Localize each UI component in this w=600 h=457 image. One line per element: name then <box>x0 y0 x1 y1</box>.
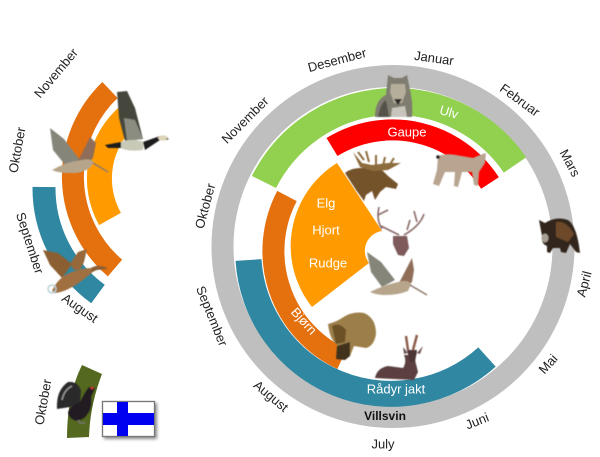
label: Elg: Elg <box>317 196 335 210</box>
icon: red deer head <box>378 207 424 256</box>
icon: lynx <box>433 153 486 187</box>
icon: brown duck <box>43 249 108 293</box>
label: Ulv: Ulv <box>438 102 461 122</box>
wedge: Elg Hjort Rudge season <box>291 163 382 307</box>
panel: main hunting calendar wheel <box>192 45 595 452</box>
ring: month wheel <box>222 76 564 417</box>
label: August: August <box>251 377 292 415</box>
label: April: April <box>573 269 595 299</box>
label: Oktober: Oktober <box>192 181 218 230</box>
icon: brown bear <box>328 313 376 360</box>
label: Januar: Januar <box>413 48 455 68</box>
icon: capercaillie <box>57 382 95 423</box>
label: Februar: Februar <box>497 81 543 120</box>
label: Mars: Mars <box>557 147 584 180</box>
label: November: November <box>31 45 81 101</box>
arc: Ulv season <box>264 101 515 182</box>
panel: capercaillie season <box>32 365 157 439</box>
icon: roe deer <box>375 335 423 380</box>
arc: dark orange season <box>73 90 115 268</box>
arc: Radyr jakt season <box>248 260 487 394</box>
icon: goose <box>105 91 169 151</box>
arc: Gaupe season <box>332 130 490 183</box>
panel: bird hunting seasons <box>6 45 169 326</box>
icon: wild boar <box>539 219 580 253</box>
arc: Bjorn season <box>273 196 342 359</box>
arc: teal season <box>44 187 98 294</box>
band: olive season <box>67 365 102 438</box>
label: Mai: Mai <box>535 351 561 377</box>
label: September: September <box>13 210 47 276</box>
label: Bjorn: Bjørn <box>288 304 320 338</box>
label: Radyr jakt: Rådyr jakt <box>367 382 426 396</box>
label: Rudge: Rudge <box>309 256 347 270</box>
label: Juni: Juni <box>463 410 491 432</box>
label: Hjort: Hjort <box>312 222 340 238</box>
icon: woodcock <box>50 128 108 173</box>
icon: woodcock <box>367 252 427 295</box>
icon: wolf <box>375 75 412 117</box>
icon: moose <box>345 151 401 201</box>
label: July: July <box>371 436 395 452</box>
label: Gaupe: Gaupe <box>387 124 427 140</box>
label: August: August <box>59 290 101 326</box>
label: Villsvin: Villsvin <box>364 409 406 423</box>
arc: light orange season <box>99 116 128 219</box>
label: November: November <box>218 93 272 147</box>
label: Oktober: Oktober <box>32 377 55 426</box>
icon: Finnish flag <box>102 402 157 439</box>
label: Oktober: Oktober <box>6 125 29 174</box>
label: Desember: Desember <box>306 45 369 75</box>
label: September: September <box>193 284 231 349</box>
